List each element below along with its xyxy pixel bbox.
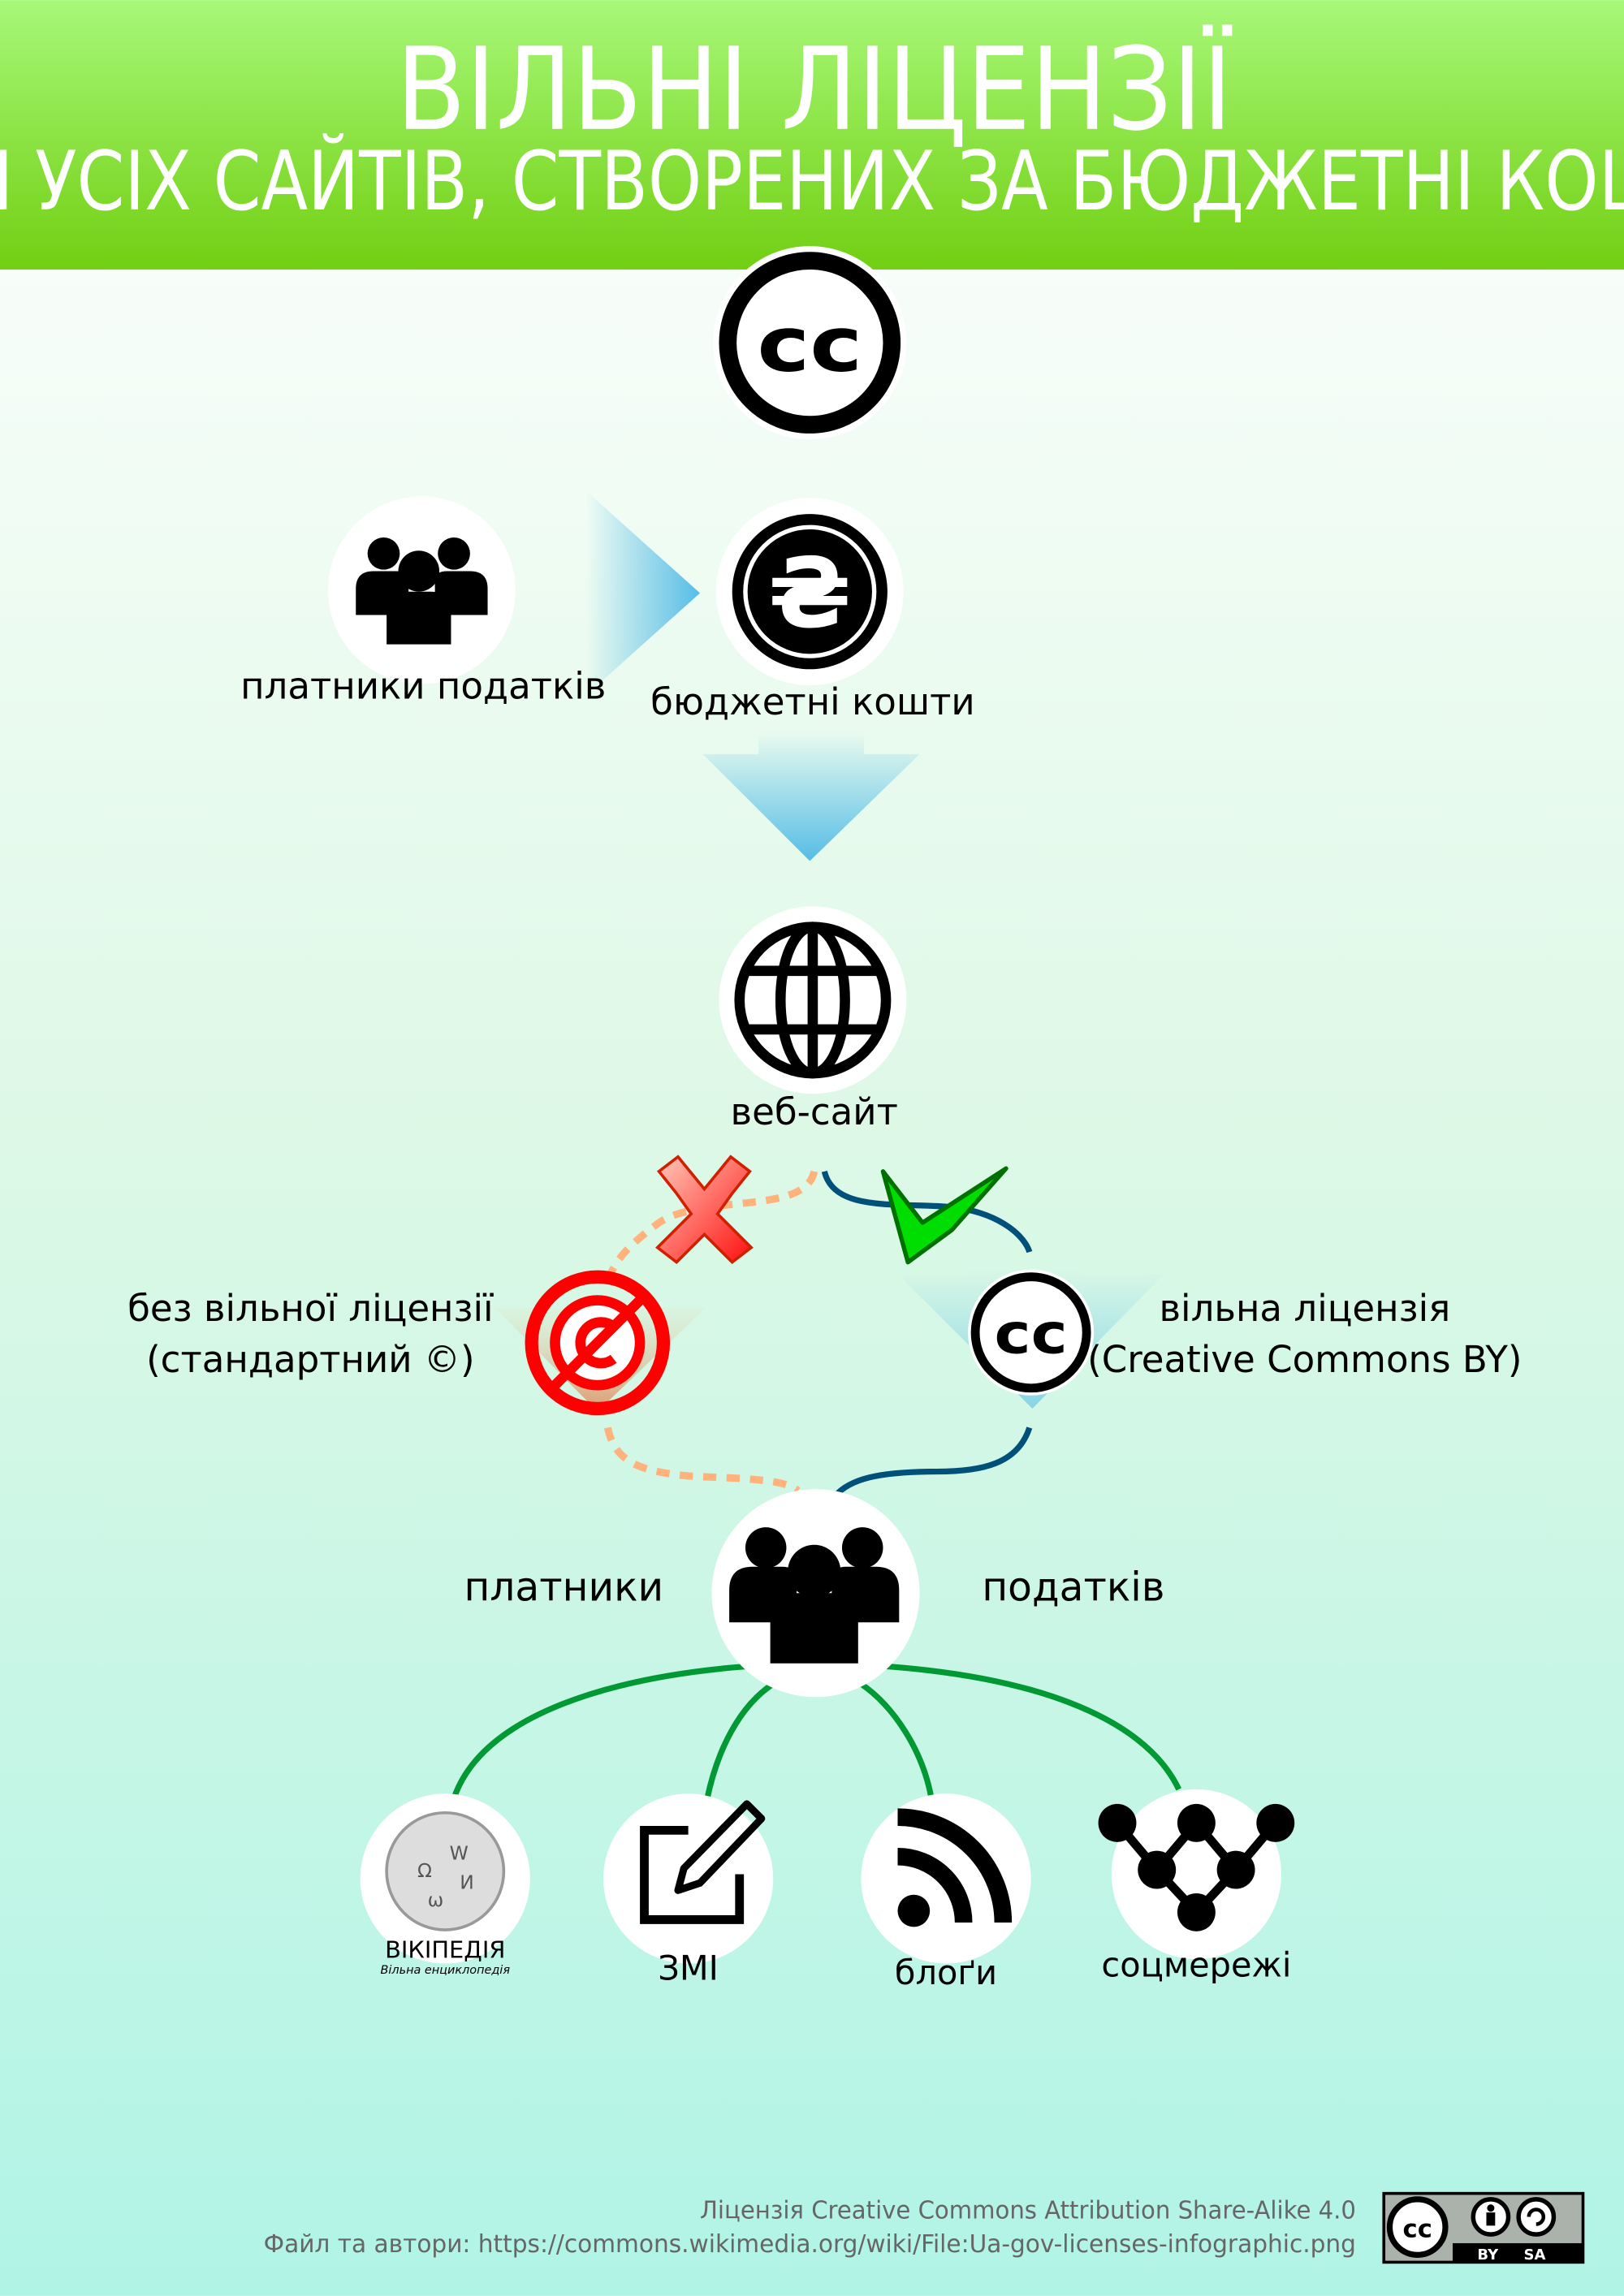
icon: wikipedia: ω [428, 1888, 443, 1911]
icon: wikipedia: И [460, 1871, 474, 1894]
path: blue (free license) [824, 1172, 1030, 1496]
icon: social network [1099, 1789, 1294, 1959]
label: budget funds: бюджетні кошти [650, 680, 975, 723]
icon: red cross [658, 1157, 751, 1262]
text: free license [1087, 1287, 1522, 1381]
label: taxpayers left: платники [464, 1564, 663, 1610]
text: no free license: (стандартний ©) [146, 1338, 475, 1381]
badge: cc by sa: SA [1524, 2246, 1546, 2264]
icon: taxpayers big [711, 1489, 920, 1697]
icon: no copyright [532, 1277, 663, 1409]
icon: wikipedia [361, 1793, 530, 1977]
header banner [0, 0, 1624, 270]
icon: cc license [968, 1270, 1094, 1396]
icon: creative commons top [713, 246, 906, 439]
icon: cc license: cc [995, 1301, 1068, 1366]
icon: rss [861, 1793, 1031, 1964]
icon: wikipedia: ВІКІПЕДІЯ [385, 1936, 505, 1963]
footer text: Ліцензія Creative Commons Attribution Share-Alike 4.0 [700, 2196, 1356, 2225]
icon: globe [719, 906, 906, 1094]
footer text: Файл та автори: https://commons.wikimedia.org/wiki/File:Ua-gov-licenses-infographic.png [264, 2230, 1356, 2259]
label: blogs: блоґи [895, 1953, 997, 1992]
badge: cc by sa: BY [1477, 2246, 1499, 2264]
label: website: веб-сайт [731, 1090, 898, 1133]
icon: wikipedia: Ω [417, 1859, 432, 1882]
label: social: соцмережі [1101, 1946, 1291, 1985]
icon: hryvnia [716, 498, 904, 685]
icon: creative commons top: cc [757, 300, 862, 389]
text: no free license: без вільної ліцензії [127, 1287, 494, 1330]
badge: cc by sa: cc [1403, 2216, 1432, 2244]
footer text [264, 2196, 1356, 2259]
arrow: blue behind cc [901, 1270, 1164, 1409]
icon: wikipedia: Вільна енциклопедія [380, 1964, 510, 1977]
connectors: green curves [454, 1666, 1179, 1798]
label: taxpayers: платники податків [240, 664, 606, 707]
arrow: down [703, 732, 920, 861]
text: no free license [127, 1287, 494, 1381]
text: free license: вільна ліцензія [1159, 1287, 1450, 1330]
icon: media [603, 1793, 773, 1964]
title: ВІЛЬНІ ЛІЦЕНЗІЇ [396, 24, 1233, 157]
icon: hryvnia: ₴ [768, 538, 851, 650]
label: media: ЗМІ [658, 1949, 719, 1987]
arrow: right [585, 490, 700, 696]
path: dashed orange (no license) [607, 1172, 814, 1491]
badge: cc by sa [1384, 2194, 1583, 2264]
icon: green check [883, 1168, 1006, 1262]
icon: wikipedia: W [450, 1841, 469, 1864]
text: free license: (Creative Commons BY) [1087, 1338, 1522, 1381]
icon: taxpayers [328, 496, 516, 684]
arrow: orange behind copyright [495, 1308, 706, 1412]
label: taxpayers right: податків [982, 1564, 1164, 1610]
